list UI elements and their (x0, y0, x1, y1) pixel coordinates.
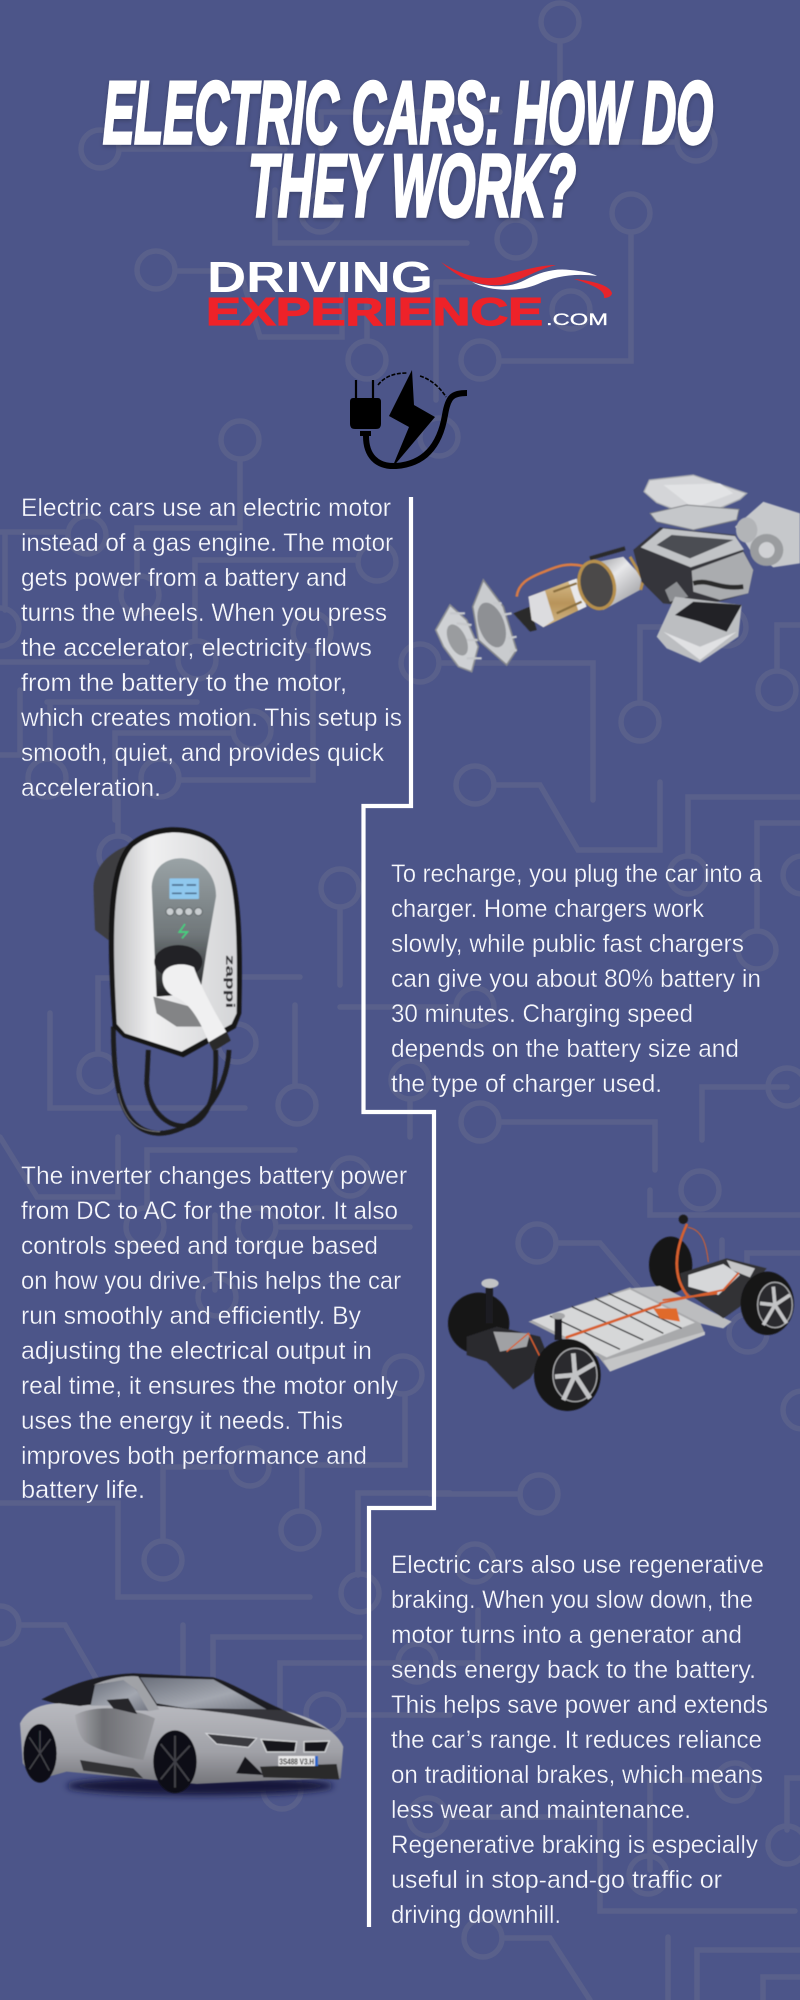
ground shadow (67, 1777, 333, 1795)
motor wiring (517, 565, 583, 597)
text block: recharging (391, 860, 762, 1098)
text block: recharging: depends on the battery size and (391, 1035, 739, 1063)
text block: inverter: adjusting the electrical output in (21, 1337, 372, 1365)
rear wheel (23, 1724, 57, 1783)
text block: electric motor: from the battery to the motor, (21, 669, 347, 697)
text block: inverter: real time, it ensures the motor only (21, 1372, 398, 1400)
rear subframe plate (630, 1286, 732, 1328)
suspension struts (489, 1283, 558, 1340)
text block: regenerative braking: This helps save power and extends (391, 1691, 768, 1719)
logo: DrivingExperience.com: EXPERIENCE (206, 291, 543, 334)
text block: regenerative braking: motor turns into a generator and (391, 1621, 742, 1649)
main housing (633, 527, 753, 607)
text block: electric motor: smooth, quiet, and provides quick (21, 739, 384, 767)
text block: inverter: on how you drive. This helps the car (21, 1267, 401, 1295)
text block: regenerative braking: the car’s range. It reduces reliance (391, 1726, 762, 1754)
grille (261, 1739, 297, 1752)
text block: regenerative braking: on traditional brakes, which means (391, 1761, 763, 1789)
text block: regenerative braking: driving downhill. (391, 1901, 561, 1929)
buttons (166, 908, 202, 916)
text block: recharging: can give you about 80% battery in (391, 965, 761, 993)
text block: electric motor: gets power from a battery and (21, 564, 347, 592)
text block: electric motor: Electric cars use an electric motor (21, 494, 391, 522)
text block: electric motor (20, 494, 402, 802)
plug handle (162, 964, 227, 1044)
car body (20, 1703, 343, 1784)
lower casing (657, 597, 742, 663)
text block: regenerative braking: braking. When you slow down, the (391, 1586, 753, 1614)
text block: inverter: uses the energy it needs. This (21, 1407, 343, 1435)
windshield (140, 1677, 267, 1709)
text block: electric motor: acceleration. (21, 774, 161, 802)
text block: electric motor: instead of a gas engine. The motor (21, 529, 393, 557)
far right wheel (649, 1237, 692, 1293)
greenhouse base (42, 1673, 283, 1712)
text block: regenerative braking: sends energy back to the battery. (391, 1656, 756, 1684)
text block: electric motor: turns the wheels. When you press (21, 599, 387, 627)
icon: plug and lightning bolt (350, 370, 467, 468)
logo: DrivingExperience.com (206, 253, 612, 334)
text block: inverter: improves both performance and (21, 1442, 367, 1470)
right wheel (741, 1272, 794, 1335)
socket (154, 945, 202, 978)
front wheel (153, 1730, 197, 1793)
text block: regenerative braking: Electric cars also use regenerative (391, 1551, 764, 1579)
text block: inverter: controls speed and torque based (21, 1232, 378, 1260)
roof frame (93, 1676, 159, 1711)
charger shell outline (109, 827, 242, 1057)
text block: recharging: the type of charger used. (391, 1070, 662, 1098)
text block: recharging: 30 minutes. Charging speed (391, 1000, 693, 1028)
lower intake (236, 1757, 263, 1775)
logo: DrivingExperience.com: .COM (546, 310, 608, 329)
inverter lid (644, 475, 747, 530)
text block: inverter: from DC to AC for the motor. It also (21, 1197, 398, 1225)
text block: recharging: To recharge, you plug the car into a (391, 860, 762, 888)
text block: inverter: run smoothly and efficiently. By (21, 1302, 361, 1330)
image: wall charger (93, 827, 242, 1133)
display panel (152, 858, 216, 997)
text block: inverter (21, 1162, 407, 1504)
left wheel (448, 1293, 509, 1354)
rotor (513, 578, 587, 632)
logo: DrivingExperience.com: DRIVING (207, 253, 433, 302)
battery tray (528, 1287, 705, 1372)
cables (113, 1027, 229, 1133)
side sill (80, 1760, 143, 1778)
wall mount (93, 843, 133, 940)
mirror (107, 1698, 137, 1714)
text block: regenerative braking: Regenerative braking is especially (391, 1831, 758, 1859)
image: EV chassis with battery (448, 1215, 794, 1411)
stator (574, 548, 643, 613)
text block: regenerative braking: less wear and maintenance. (391, 1796, 691, 1824)
green charge symbol (179, 924, 187, 938)
front wheel (534, 1339, 601, 1411)
end plate two (472, 580, 517, 665)
connector line (364, 497, 434, 1927)
hood dark panel (187, 1708, 328, 1730)
text block: recharging: slowly, while public fast chargers (391, 930, 744, 958)
side window (91, 1680, 148, 1711)
text block: regenerative braking (391, 1551, 768, 1929)
image: exploded electric motor (436, 475, 800, 672)
text block: regenerative braking: useful in stop-and-go traffic or (391, 1866, 722, 1894)
title (103, 63, 713, 235)
text block: inverter: battery life. (21, 1476, 145, 1504)
text block: inverter: The inverter changes battery power (21, 1162, 407, 1190)
brand text: zappi (223, 955, 237, 1008)
door panel (75, 1708, 155, 1760)
text block: electric motor: which creates motion. This setup is (20, 704, 402, 732)
image: silver sports car (20, 1673, 343, 1795)
text block: electric motor: the accelerator, electricity flows (21, 634, 372, 662)
charger shell (114, 832, 237, 1052)
headlight (206, 1733, 257, 1747)
lcd screen (169, 878, 199, 899)
right gearbox (735, 502, 800, 567)
text block: recharging: charger. Home chargers work (391, 895, 704, 923)
licence plate: 3S488 V3.H (279, 1756, 314, 1766)
front motor (467, 1327, 547, 1389)
orange cabling (567, 1225, 738, 1337)
rear motor (680, 1258, 767, 1318)
end plate one (436, 605, 482, 672)
